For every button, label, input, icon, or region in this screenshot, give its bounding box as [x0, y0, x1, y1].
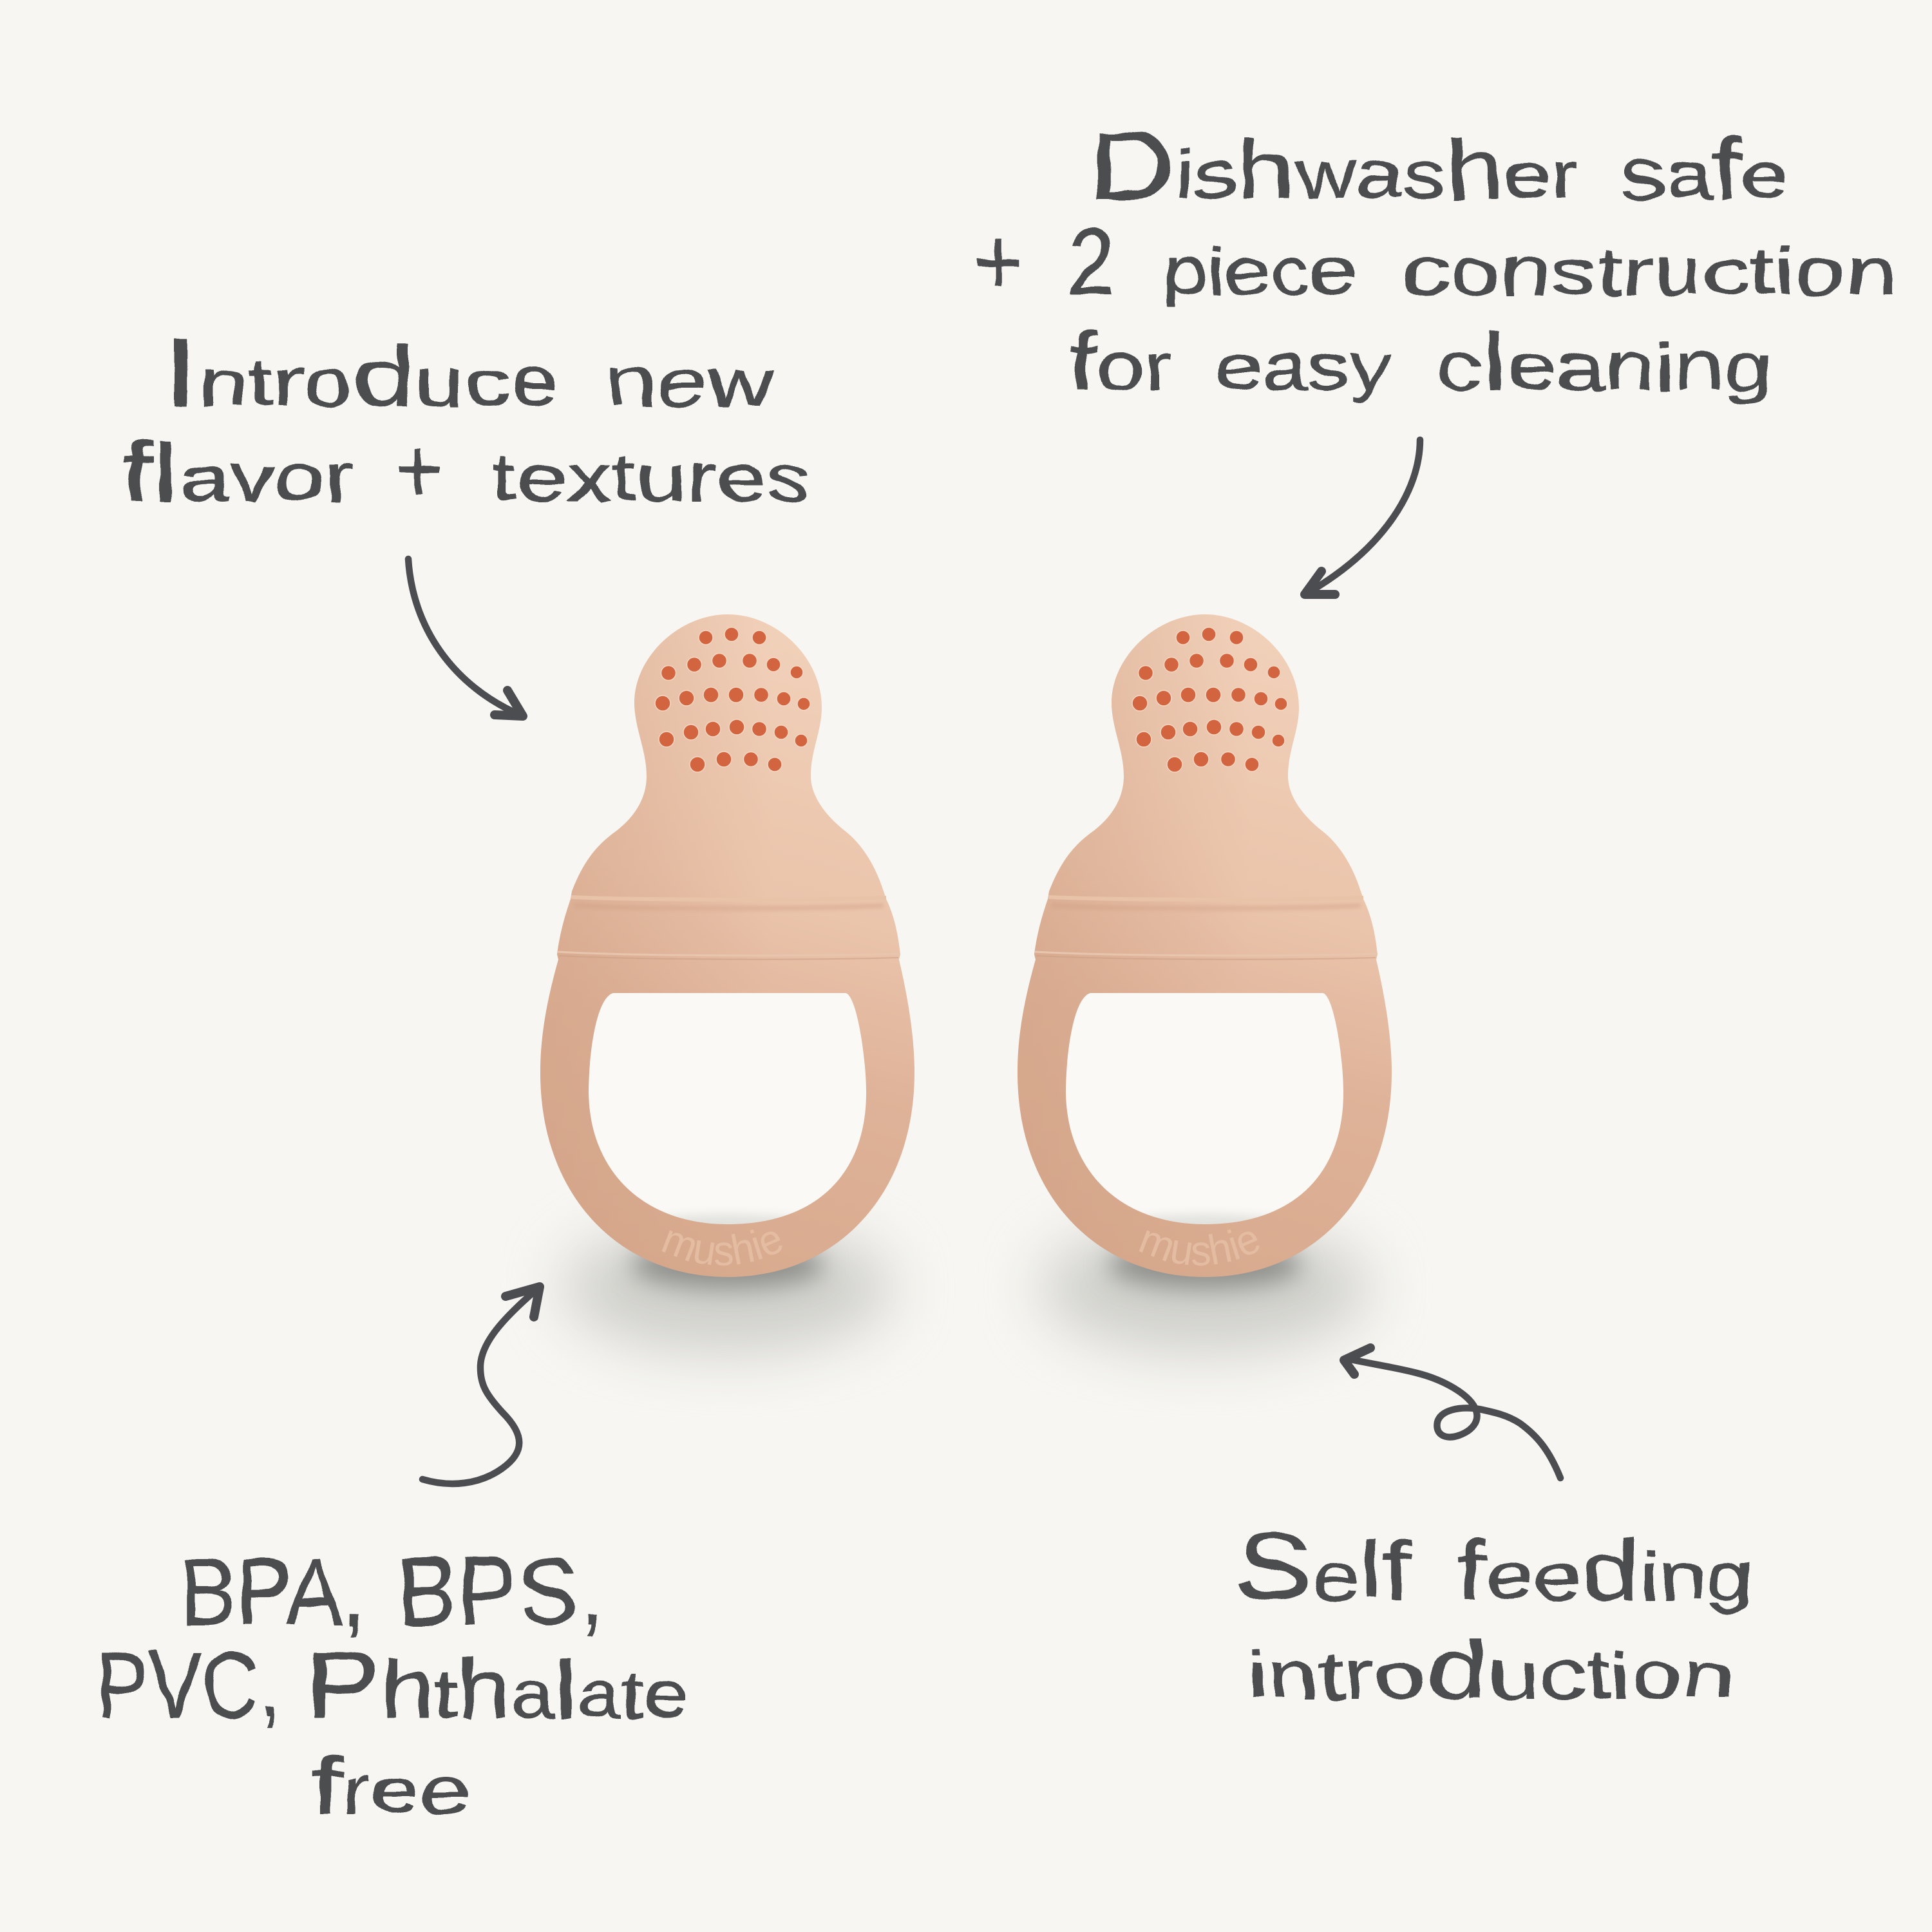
left teether product: [540, 614, 914, 1277]
right teether product: [1018, 614, 1392, 1277]
arrow: flavor callout to left teether: [408, 559, 523, 716]
callout: dishwasher safe: easy: [1216, 330, 1391, 404]
arrow: BPA callout to left teether: [422, 1287, 540, 1484]
callout: self feeding: Self: [1235, 1514, 1412, 1620]
left teether hole background: [640, 1188, 819, 1216]
callout: BPA free: [96, 1539, 688, 1832]
callout: introduce new flavor: +: [397, 416, 442, 522]
callout: introduce new flavor: [122, 320, 812, 522]
callout: dishwasher safe: [975, 113, 1897, 408]
arrow: dishwasher callout to right teether: [1305, 440, 1420, 594]
callout: dishwasher safe: construction: [1403, 234, 1897, 309]
callout: dishwasher safe: +: [975, 209, 1021, 315]
callout: BPA free: free: [310, 1739, 471, 1832]
callout: BPA free: Phthalate: [305, 1633, 688, 1738]
shadow under right teether: [1041, 1224, 1369, 1352]
callout: BPA free: PVC,: [96, 1633, 281, 1738]
callout: self feeding: intro d uction: [1247, 1624, 1734, 1716]
shadow under left teether: [564, 1224, 892, 1352]
callout: introduce new flavor: textures: [491, 441, 812, 516]
right teether logo: mushie: [1139, 1229, 1260, 1266]
callout: BPA free: BPA,: [180, 1539, 366, 1645]
callout: dishwasher safe: 2: [1068, 209, 1114, 315]
arrow: self feeding callout to right teether: [1344, 1348, 1560, 1478]
callout: dishwasher safe: for: [1068, 316, 1172, 408]
left teether logo: mushie: [662, 1229, 782, 1266]
callout: dishwasher safe: safe: [1622, 124, 1788, 216]
callout: self feeding: [1235, 1514, 1754, 1716]
callout: dishwasher safe: piece: [1163, 234, 1356, 309]
right teether hole background: [1117, 1188, 1296, 1216]
callout: BPA free: BPS,: [397, 1539, 604, 1645]
callout: introduce new flavor: flavor: [122, 427, 354, 519]
callout: introduce new flavor: Intro duce: [163, 320, 560, 426]
callout: dishwasher safe: cleaning: [1437, 316, 1774, 408]
callout: introduce new flavor: new: [607, 345, 773, 420]
callout: dishwasher safe: D ishwas her: [1089, 113, 1579, 218]
callout: self feeding: feeding: [1457, 1525, 1754, 1617]
